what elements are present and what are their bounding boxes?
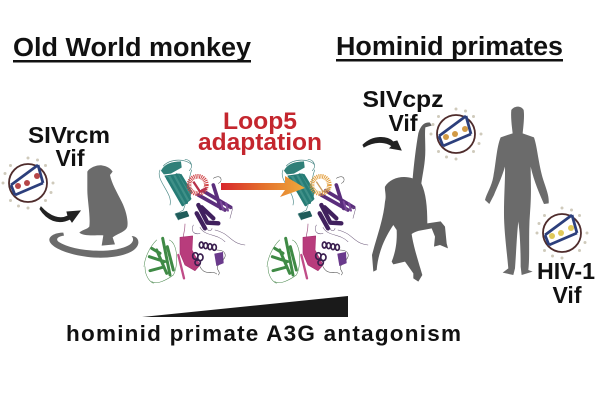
wedge: antagonism gradient bbox=[142, 296, 348, 317]
icon: chimpanzee silhouette bbox=[372, 122, 448, 282]
heading: Hominid primates: Hominid primates bbox=[336, 33, 563, 61]
label: Loop5 adaptation bbox=[198, 108, 322, 156]
protein structure: after adaptation bbox=[267, 159, 368, 283]
protein structure: before adaptation bbox=[144, 159, 245, 283]
arrow: virus to chimpanzee bbox=[363, 137, 401, 150]
label: HIV-1 Vif: Vif bbox=[553, 282, 582, 308]
label: Loop5 adaptation: Loop5 bbox=[223, 108, 297, 135]
label: Loop5 adaptation: adaptation bbox=[198, 129, 322, 156]
label: SIVcpz Vif: SIVcpz bbox=[362, 86, 444, 112]
icon: SIVcpz virus particle bbox=[430, 108, 482, 160]
caption: hominid primate A3G antagonism: hominid primate A3G antagonism bbox=[66, 321, 461, 346]
icon: SIVrcm virus particle bbox=[2, 156, 54, 210]
label: HIV-1 Vif: HIV-1 bbox=[537, 258, 595, 284]
heading: Old World monkey: Old World monkey bbox=[13, 34, 252, 62]
arrow: Loop5 gradient arrow bbox=[221, 176, 305, 197]
label: SIVcpz Vif: Vif bbox=[389, 110, 418, 136]
label: SIVrcm Vif: Vif bbox=[56, 145, 85, 171]
arrow: virus to monkey bbox=[40, 207, 80, 222]
label: SIVrcm Vif: SIVrcm bbox=[28, 122, 110, 148]
label: SIVrcm Vif bbox=[28, 122, 110, 171]
icon: HIV-1 virus particle bbox=[536, 206, 588, 260]
icon: monkey silhouette bbox=[49, 165, 138, 258]
icon: human silhouette bbox=[485, 107, 549, 275]
label: HIV-1 Vif bbox=[537, 258, 595, 308]
label: SIVcpz Vif bbox=[362, 86, 444, 136]
